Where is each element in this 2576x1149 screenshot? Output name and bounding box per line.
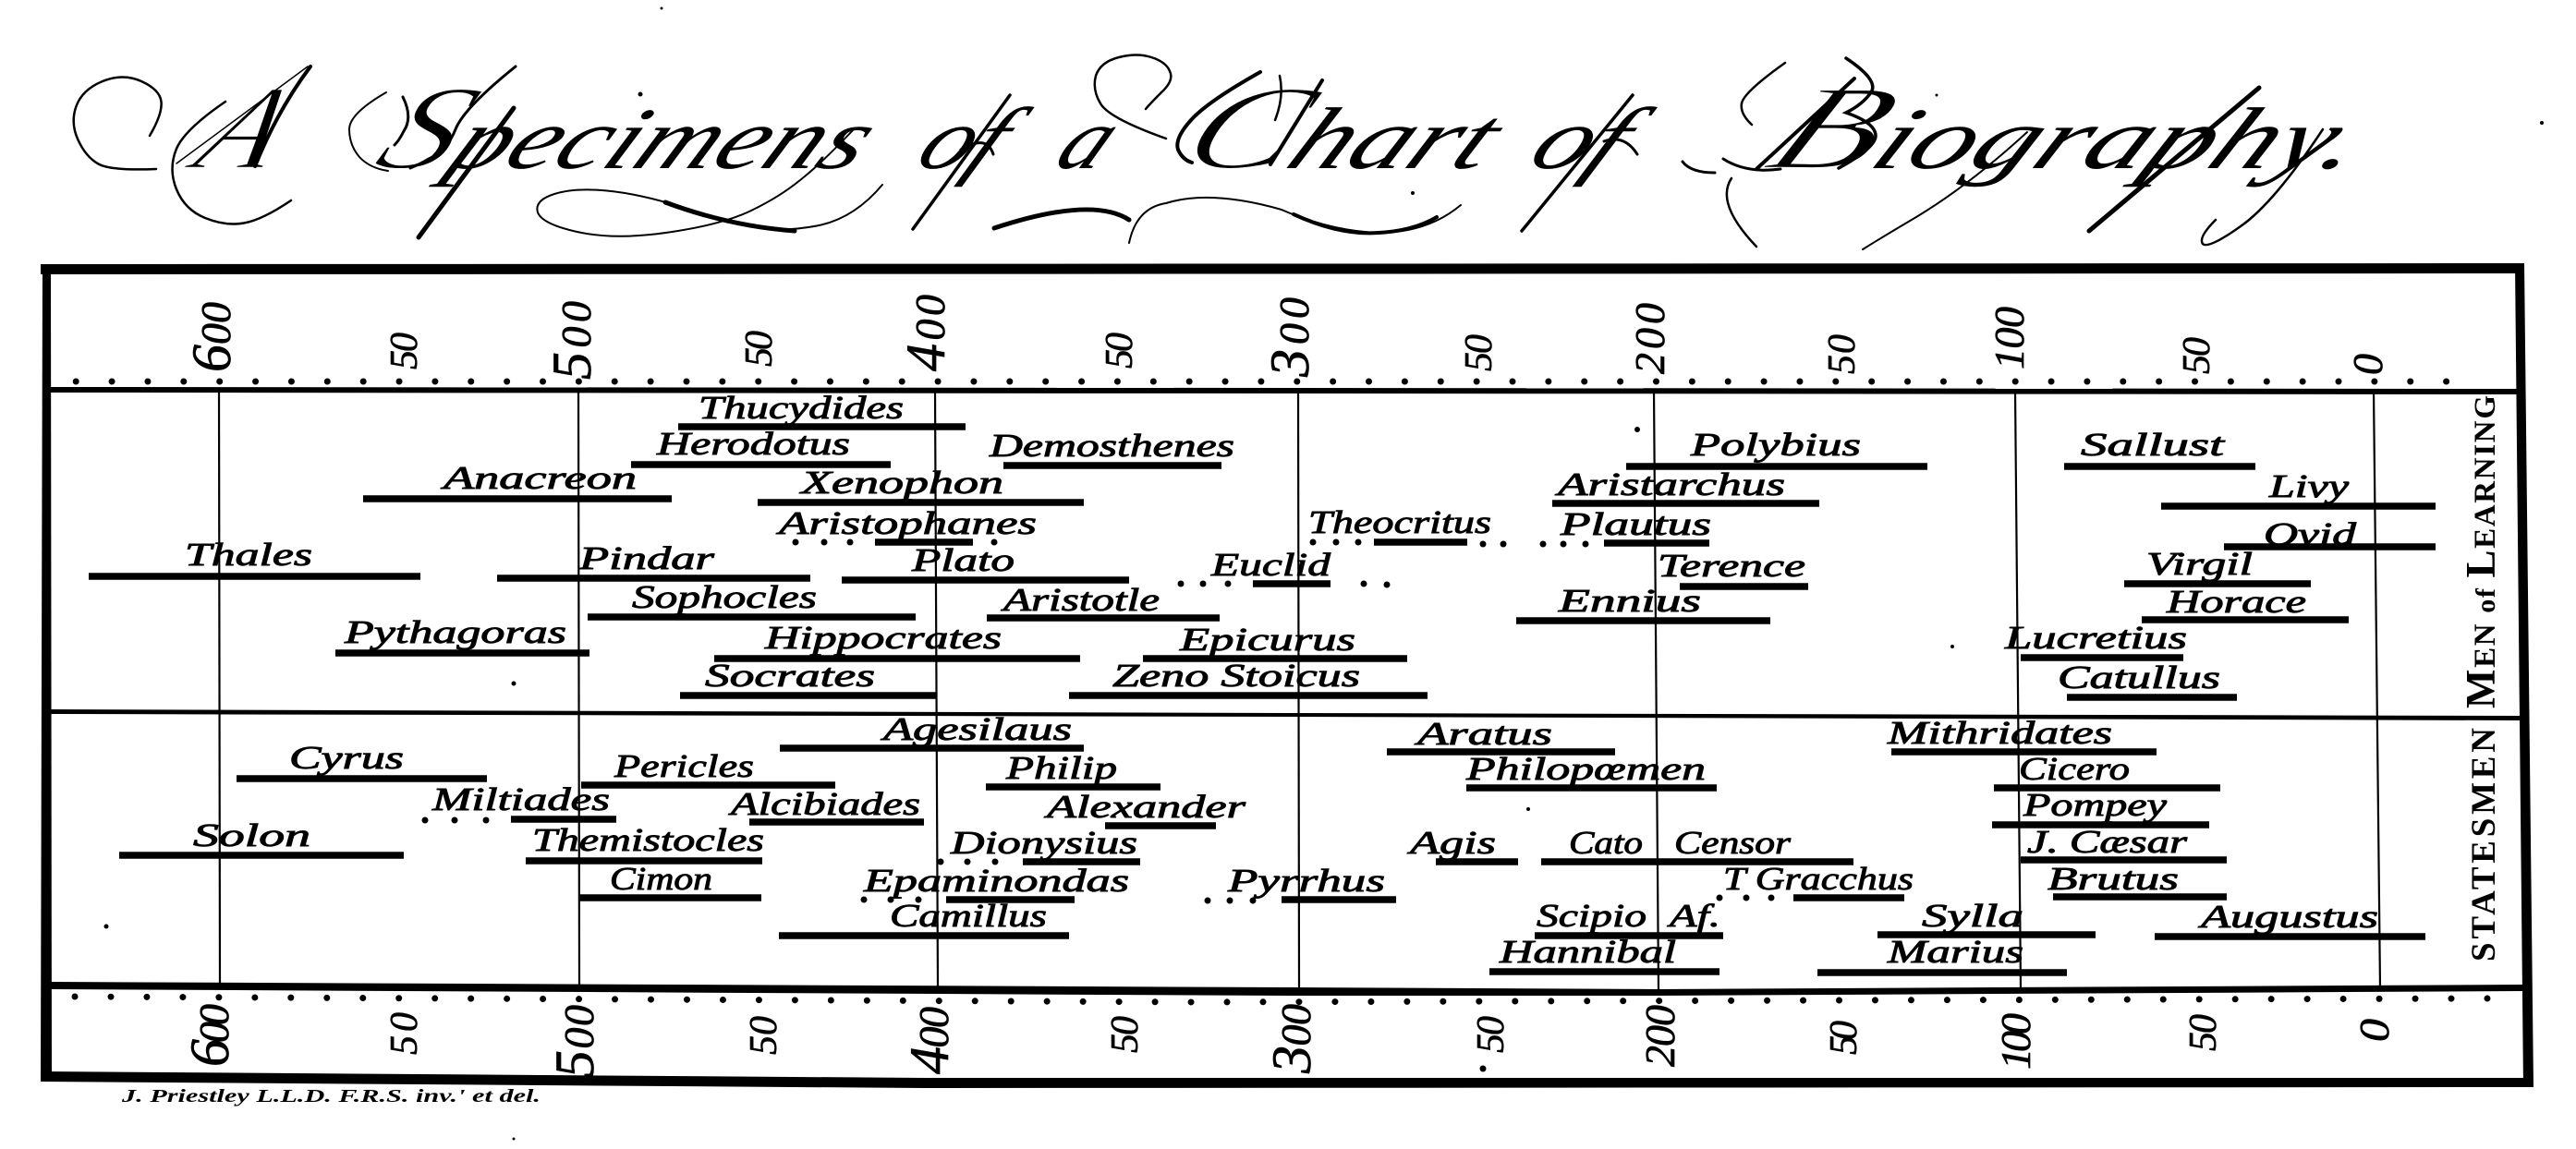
number: 50: 50 xyxy=(1821,334,1864,374)
J. Caesar lifespan: J. Cæsar xyxy=(2027,824,2188,860)
number: 300: 300 xyxy=(1261,1004,1322,1074)
number: 50: 50 xyxy=(1099,333,1141,369)
Augustus lifespan: Augustus xyxy=(2198,899,2378,935)
Livy lifespan: Livy xyxy=(2268,468,2350,504)
title word: of: of xyxy=(1514,91,1667,187)
Miltiades lifespan: Miltiades xyxy=(431,781,610,817)
Virgil lifespan: Virgil xyxy=(2146,546,2253,582)
Pompey lifespan: Pompey xyxy=(2023,787,2168,823)
Zeno Stoicus lifespan: Zeno Stoicus xyxy=(1112,658,1360,694)
Ennius lifespan: Ennius xyxy=(1557,583,1701,619)
bottom time scale dots xyxy=(75,997,2491,1002)
Aristarchus lifespan: Aristarchus xyxy=(1555,466,1785,502)
Socrates lifespan: Socrates xyxy=(705,658,875,694)
Miltiades lifespan xyxy=(421,781,616,824)
Sallust lifespan: Sallust xyxy=(2081,427,2226,463)
number: 500: 500 xyxy=(544,1005,605,1078)
grid lines xyxy=(219,390,2380,990)
Cyrus lifespan: Cyrus xyxy=(289,740,404,776)
T Gracchus lifespan: T Gracchus xyxy=(1723,861,1914,897)
Epaminondas lifespan: Epaminondas xyxy=(863,863,1129,899)
Epaminondas lifespan xyxy=(861,863,1129,903)
Plautus lifespan: Plautus xyxy=(1559,506,1711,542)
Thucydides lifespan: Thucydides xyxy=(699,390,904,426)
title word: of: of xyxy=(902,91,1043,187)
title word: Biography.: Biography. xyxy=(1746,62,2403,195)
number: 50: 50 xyxy=(2176,337,2218,374)
Polybius lifespan: Polybius xyxy=(1689,427,1861,463)
Sylla lifespan: Sylla xyxy=(1922,898,2023,934)
Catullus lifespan: Catullus xyxy=(2058,659,2220,695)
number: 50: 50 xyxy=(743,1016,785,1055)
Plato lifespan: Plato xyxy=(911,542,1015,578)
top time scale dots xyxy=(76,379,2482,384)
title: A Specimen of a Chart of Biography xyxy=(74,55,2403,249)
number: 200: 200 xyxy=(1636,1005,1683,1067)
Cato Censor lifespan: Censor xyxy=(1674,825,1791,861)
Horace lifespan: Horace xyxy=(2166,584,2306,620)
Terence lifespan: Terence xyxy=(1658,548,1805,584)
number: 50: 50 xyxy=(2182,1014,2225,1051)
Theocritus lifespan: Theocritus xyxy=(1308,504,1491,540)
Herodotus lifespan: Herodotus xyxy=(656,426,850,462)
Lucretius lifespan: Lucretius xyxy=(2003,620,2187,656)
Cato Censor lifespan: Cato xyxy=(1569,825,1643,861)
Sophocles lifespan: Sophocles xyxy=(632,579,817,615)
title flourishes xyxy=(74,55,2323,249)
chart frame xyxy=(41,263,2533,1088)
Scipio Af. lifespan: Scipio xyxy=(1537,898,1646,934)
number: 400: 400 xyxy=(899,1007,960,1074)
number: 50: 50 xyxy=(383,333,426,369)
number: 50: 50 xyxy=(1470,1016,1513,1053)
side label: men of learning: MEN of LEARNING xyxy=(2458,395,2504,708)
Mithridates lifespan: Mithridates xyxy=(1887,715,2112,751)
number: 200: 200 xyxy=(1626,303,1673,374)
Themistocles lifespan: Themistocles xyxy=(532,822,764,858)
bottom scale numbers xyxy=(179,1004,2398,1078)
top scale numbers xyxy=(181,295,2391,380)
Solon lifespan: Solon xyxy=(193,817,310,853)
Aristotle lifespan: Aristotle xyxy=(1001,582,1160,618)
Aratus lifespan: Aratus xyxy=(1415,716,1552,752)
side label: statesmen: STATESMEN xyxy=(2465,728,2503,962)
number: 0: 0 xyxy=(2351,1019,2398,1042)
Camillus lifespan: Camillus xyxy=(890,898,1047,934)
Dionysius lifespan: Dionysius xyxy=(950,825,1137,861)
Thales lifespan: Thales xyxy=(185,537,312,573)
Philopoemen lifespan: Philopœmen xyxy=(1465,751,1706,787)
Agis lifespan xyxy=(1407,825,1518,862)
title word: Chart: Chart xyxy=(1160,62,1539,195)
Marius lifespan: Marius xyxy=(1887,934,2023,970)
T Gracchus lifespan xyxy=(1717,861,1914,901)
Pyrrhus lifespan xyxy=(1205,863,1396,903)
number: 50: 50 xyxy=(738,331,781,367)
title word: a: a xyxy=(1041,91,1139,187)
title word: Specimens: Specimens xyxy=(356,62,911,195)
Brutus lifespan: Brutus xyxy=(2047,861,2179,897)
number: 400: 400 xyxy=(895,295,956,371)
Hippocrates lifespan: Hippocrates xyxy=(764,620,1002,656)
number: 600: 600 xyxy=(181,302,242,372)
Euclid lifespan xyxy=(1177,547,1390,587)
Dionysius lifespan xyxy=(937,825,1140,865)
Hannibal lifespan: Hannibal xyxy=(1499,934,1676,970)
Pyrrhus lifespan: Pyrrhus xyxy=(1226,863,1385,899)
Alexander lifespan: Alexander xyxy=(1044,789,1246,825)
Aristophanes lifespan xyxy=(776,505,1037,545)
Aristophanes lifespan: Aristophanes xyxy=(776,505,1037,541)
Anacreon lifespan: Anacreon xyxy=(441,460,637,496)
Agis lifespan: Agis xyxy=(1407,825,1496,861)
Agesilaus lifespan: Agesilaus xyxy=(881,711,1072,747)
engraver credit: J. Priestley L.L.D. F.R.S. inv.' et del. xyxy=(120,1086,541,1107)
Theocritus lifespan xyxy=(1308,504,1506,547)
Pythagoras lifespan: Pythagoras xyxy=(344,614,566,650)
Pindar lifespan: Pindar xyxy=(577,540,715,576)
Scipio Af. lifespan xyxy=(1535,898,1723,936)
Cicero lifespan: Cicero xyxy=(2019,751,2130,787)
number: 100: 100 xyxy=(1992,1013,2039,1070)
number: 50: 50 xyxy=(1104,1016,1147,1053)
number: 600: 600 xyxy=(179,1004,240,1067)
Alcibiades lifespan: Alcibiades xyxy=(728,786,920,822)
number: 50: 50 xyxy=(383,1012,426,1055)
Philip lifespan: Philip xyxy=(1005,750,1117,786)
number: 50: 50 xyxy=(1823,1021,1865,1055)
Cato Censor lifespan xyxy=(1541,825,1853,862)
Demosthenes lifespan: Demosthenes xyxy=(989,428,1234,464)
number: 100: 100 xyxy=(1986,307,2033,369)
Plautus lifespan xyxy=(1539,506,1711,547)
Ovid lifespan: Ovid xyxy=(2264,516,2357,552)
panel: statesmen xyxy=(119,711,2425,973)
Cimon lifespan: Cimon xyxy=(610,861,712,897)
Euclid lifespan: Euclid xyxy=(1210,547,1331,583)
Epicurus lifespan: Epicurus xyxy=(1178,622,1355,658)
Scipio Af. lifespan: Af. xyxy=(1667,898,1720,934)
Pericles lifespan: Pericles xyxy=(614,748,754,784)
number: 300: 300 xyxy=(1259,297,1320,378)
number: 0: 0 xyxy=(2344,354,2391,375)
number: 500: 500 xyxy=(541,301,602,380)
panel: men of learning xyxy=(89,390,2436,697)
title word: A: A xyxy=(168,62,321,195)
Xenophon lifespan: Xenophon xyxy=(798,465,1003,501)
number: 50: 50 xyxy=(1458,334,1501,371)
